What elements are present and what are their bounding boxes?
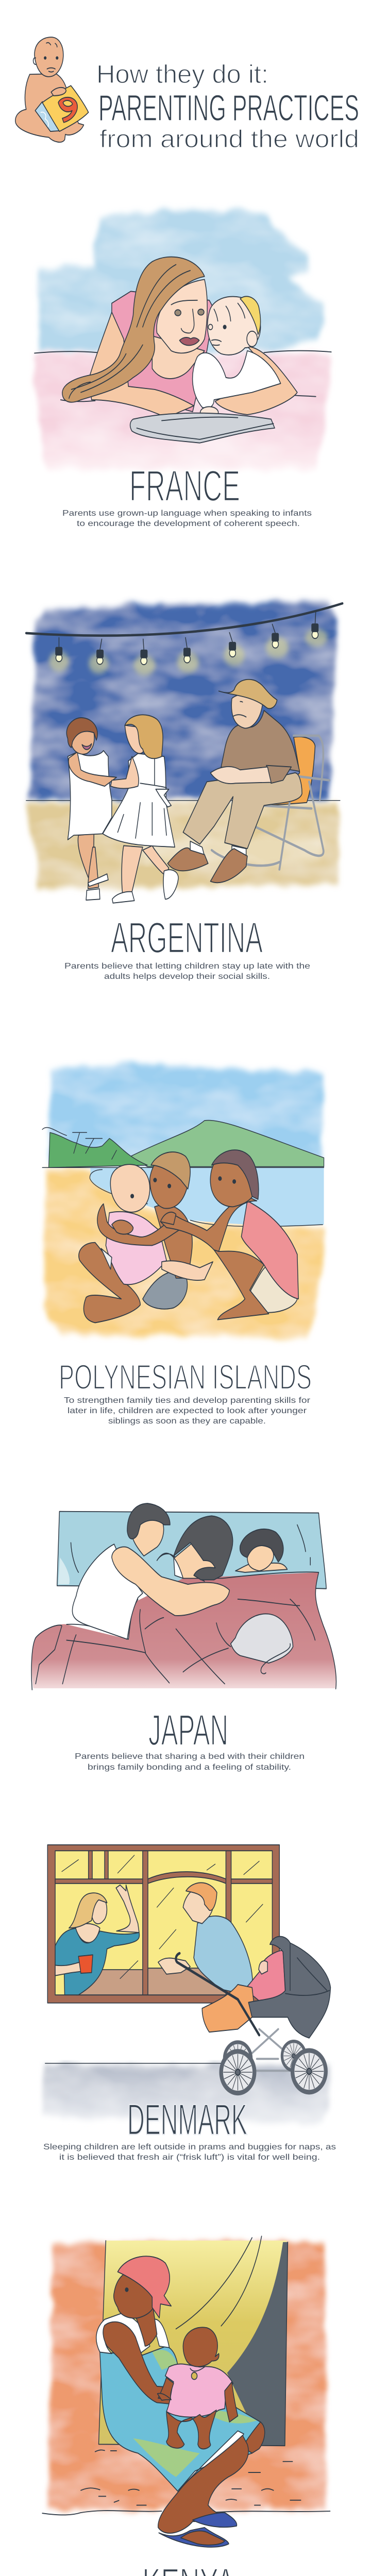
illustration: parents at a cafe window with a pram outside xyxy=(43,1845,330,2124)
header xyxy=(15,37,359,153)
panel: France xyxy=(35,210,331,528)
description: Denmark: Sleeping children are left outside in prams and buggies for naps, as xyxy=(43,2143,336,2151)
description: Polynesian Islands: To strengthen family ties and develop parenting skills for xyxy=(64,1396,311,1405)
description: Argentina: adults helps develop their social skills. xyxy=(104,972,270,981)
illustration: siblings caring for a baby on the beach xyxy=(42,1065,325,1337)
illustration: Kisii mother with baby on her lap xyxy=(42,2236,330,2547)
heading: France: FRANCE xyxy=(129,462,240,510)
illustration: mother reading newspaper with baby xyxy=(35,210,331,470)
panel: Japan xyxy=(31,1503,336,1772)
description: France: to encourage the development of coherent speech. xyxy=(77,519,300,528)
description: Denmark xyxy=(43,2143,336,2162)
illustration: family sharing a bed with a cat xyxy=(31,1503,336,1690)
panel: Denmark xyxy=(43,1845,336,2162)
description: Japan xyxy=(75,1752,305,1772)
heading: Argentina: ARGENTINA xyxy=(111,913,263,962)
panel: Polynesian Islands xyxy=(42,1065,325,1426)
panel: Kenya xyxy=(42,2236,330,2576)
heading: Japan: JAPAN xyxy=(148,1706,228,1754)
description: Japan: brings family bonding and a feeling of stability. xyxy=(88,1763,291,1772)
illustration: children dancing in front of grandfather under string lights xyxy=(26,602,343,903)
description: Argentina xyxy=(64,962,310,981)
description: France xyxy=(62,509,312,528)
description: Polynesian Islands: later in life, children are expected to look after younger xyxy=(68,1406,307,1415)
heading: Denmark: DENMARK xyxy=(127,2095,247,2144)
title: from around the world: from around the world xyxy=(99,126,359,153)
title: How they do it: How they do it: xyxy=(96,60,268,89)
description: Polynesian Islands xyxy=(64,1396,311,1426)
description: Japan: Parents believe that sharing a bed with their children xyxy=(75,1752,305,1761)
description: Denmark: it is believed that fresh air (“frisk luft”) is vital for well being. xyxy=(59,2153,320,2162)
description: Polynesian Islands: siblings as soon as they are capable. xyxy=(108,1417,266,1426)
description: France: Parents use grown-up language when speaking to infants xyxy=(62,509,312,518)
description: Argentina: Parents believe that letting children stay up late with the xyxy=(64,962,310,971)
panel: Argentina xyxy=(26,602,343,981)
icon: baby holding toy block xyxy=(15,37,89,142)
